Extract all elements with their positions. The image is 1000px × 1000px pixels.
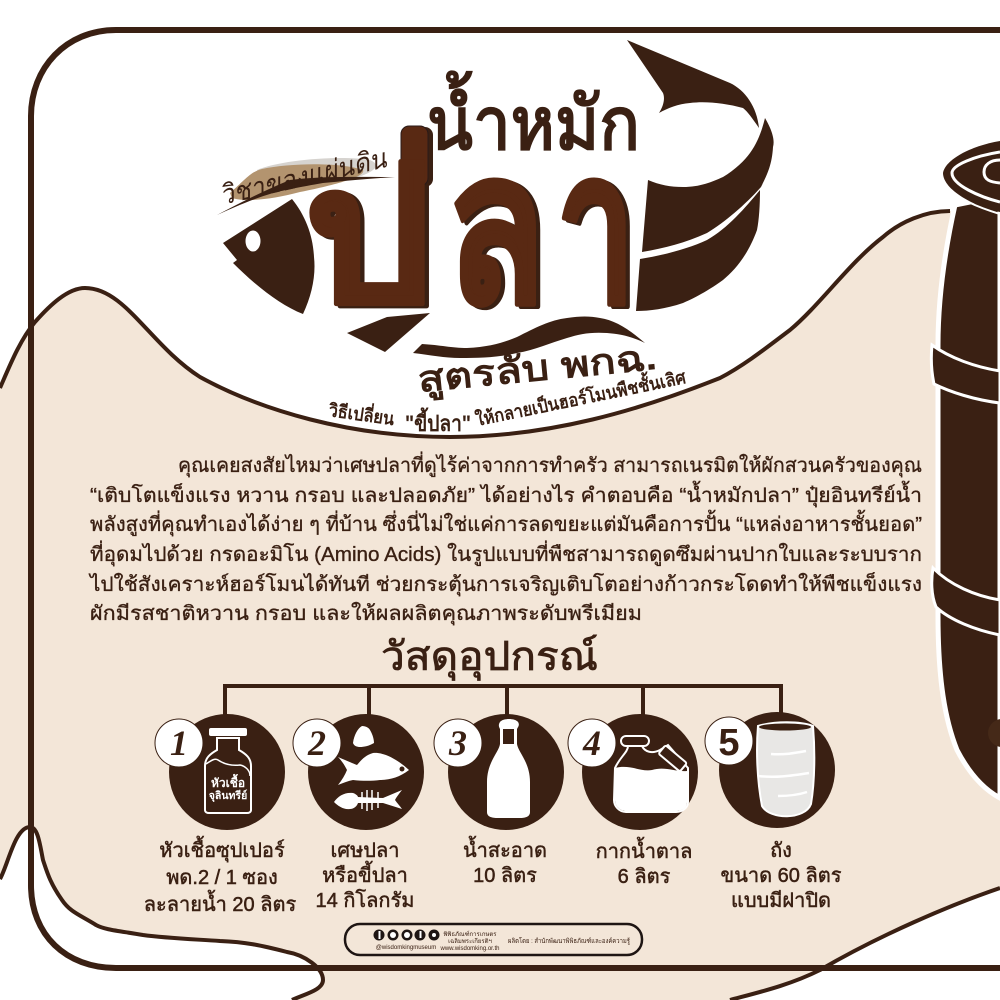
footer museum: พิพิธภัณฑ์การเกษตร [443, 930, 497, 938]
material labels: ละลายน้ำ 20 ลิตร [144, 890, 296, 916]
tagline: วิธีเปลี่ยน [327, 397, 397, 429]
icon: starter bottle [205, 738, 251, 813]
material 5: 5 [718, 722, 740, 764]
footer pill [345, 924, 642, 955]
tagline: ให้กลายเป็นฮอร์โมนพืชชั้นเลิศ [473, 363, 688, 430]
barrel band upper [931, 345, 1000, 403]
material 1: 1 [170, 723, 188, 763]
title line 2: ล [447, 111, 545, 346]
material labels: หรือขี้ปลา [322, 861, 408, 887]
material 1: จุลินทรีย์ [209, 789, 247, 803]
material 3 [434, 714, 564, 830]
title line 2 shadow [309, 113, 639, 348]
material 1: หัวเชื้อ [211, 773, 245, 790]
footer [345, 924, 642, 955]
material 4 [568, 714, 698, 830]
body paragraph: ผักมีรสชาติหวาน กรอบ และให้ผลผลิตคุณภาพระดับพรีเมียม [90, 602, 642, 626]
footer credit: ผลิตโดย : สำนักพัฒนาพิพิธภัณฑ์และองค์ความรู้ [508, 937, 630, 945]
beige shape outline [0, 211, 1000, 1000]
body paragraph: ที่อุดมไปด้วย กรดอะมิโน (Amino Acids) ในรูปแบบที่พืชสามารถดูดซึมผ่านปากใบและระบบราก [90, 540, 922, 567]
title line 2 shadow: ป [309, 132, 435, 344]
material labels: 6 ลิตร [618, 866, 671, 888]
material 1 [155, 714, 285, 830]
material labels: ถัง [770, 840, 792, 862]
material 5 [705, 712, 835, 828]
body paragraph: ไปใช้สังเคราะห์ฮอร์โมนได้ทันที ช่วยกระตุ้นการเจริญเติบโตอย่างก้าวกระโดดทำให้พืชแข็งแรง [88, 571, 922, 597]
title line 2 [305, 111, 635, 346]
barrel band lower [932, 568, 1000, 635]
beige background shape [0, 211, 1000, 1000]
material labels: น้ำสะอาด [463, 836, 547, 862]
body paragraph [88, 451, 922, 626]
barrel [931, 141, 1000, 798]
title line 2: ป [305, 130, 431, 342]
fish logo: tail shapes [223, 40, 774, 358]
footer handle: @wisdomkingmuseum [376, 945, 436, 951]
material labels: เศษปลา [331, 840, 399, 862]
title [305, 69, 640, 348]
material 4: 4 [582, 723, 601, 763]
material 2: 2 [307, 723, 326, 763]
barrel body [938, 196, 1000, 798]
body paragraph: พลังสูงที่คุณทำเองได้ง่าย ๆ ที่บ้าน ซึ่งนี่ไม่ใช่แค่การลดขยะแต่มันคือการปั้น “แหล่งอาหารชั้นยอด” [90, 510, 922, 537]
materials heading: วัสดุอุปกรณ์ [381, 634, 598, 681]
title line 2: า [557, 111, 635, 346]
material labels: กากน้ำตาล [596, 837, 692, 863]
material 3: 3 [448, 723, 467, 763]
material labels: พด.2 / 1 ซอง [166, 867, 278, 889]
title line 1: น้ำหมัก [427, 69, 640, 165]
footer museum: www.wisdomking.or.th [439, 946, 500, 952]
tagline [327, 363, 688, 436]
connector tree [225, 686, 781, 716]
material labels: ขนาด 60 ลิตร [721, 865, 842, 887]
material labels [144, 836, 842, 916]
material labels: หัวเชื้อซุปเปอร์ [159, 836, 285, 863]
material 2 [293, 714, 424, 830]
barrel highlight [988, 719, 1000, 747]
social icons [374, 930, 440, 940]
title line 2 shadow: า [561, 113, 639, 348]
tagline: "ขี้ปลา" [405, 407, 471, 436]
material labels: 10 ลิตร [473, 865, 537, 887]
barrel lid [943, 141, 1000, 212]
body paragraph: คุณเคยสงสัยไหมว่าเศษปลาที่ดูไร้ค่าจากการทำครัว สามารถเนรมิตให้ผักสวนครัวของคุณ [178, 451, 922, 478]
title line 2 shadow: ล [451, 113, 549, 348]
icon: water bottle [487, 719, 530, 818]
body paragraph: “เติบโตแข็งแรง หวาน กรอบ และปลอดภัย” ได้อย่างไร คำตอบคือ “น้ำหมักปลา” ปุ๋ยอินทรีย์น้ำ [90, 481, 922, 508]
material labels: แบบมีฝาปิด [731, 890, 831, 912]
material labels: 14 กิโลกรัม [316, 889, 414, 912]
icon: fish and bones [334, 726, 409, 811]
brush caption: วิชาของแผ่นดิน [217, 143, 390, 211]
brush stroke [217, 158, 395, 215]
icon: drum with lid [757, 722, 814, 816]
footer museum: เฉลิมพระเกียรติฯ [448, 937, 492, 945]
subtitle: สูตรลับ พกฉ. [416, 336, 659, 403]
footer museum [439, 930, 500, 952]
icon: molasses jug [614, 745, 688, 812]
